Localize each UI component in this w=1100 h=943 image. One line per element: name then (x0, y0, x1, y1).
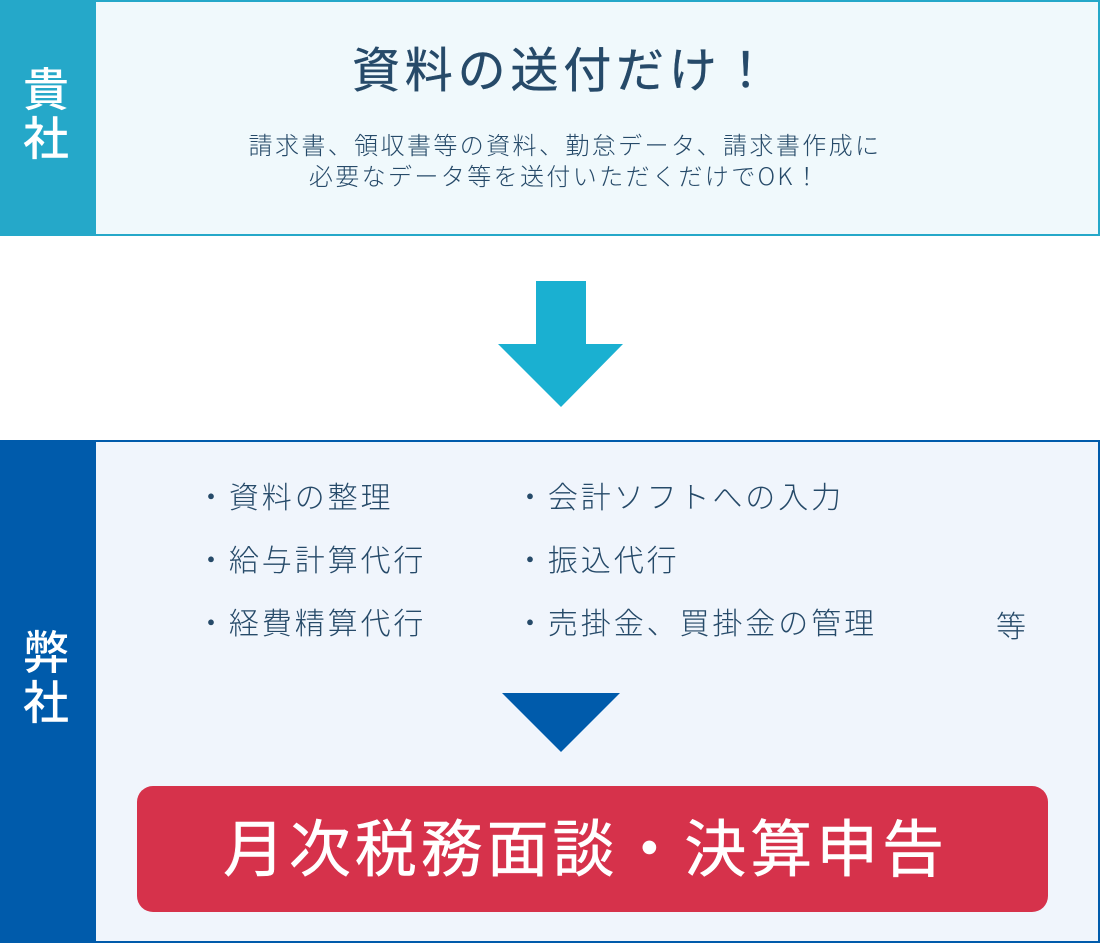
task list left: ・資料の整理 (196, 482, 393, 515)
arrow: down (498, 281, 623, 407)
result banner: 月次税務面談・決算申告 (223, 816, 948, 885)
heading: 資料の送付だけ！ (352, 45, 774, 98)
task list right: ・会計ソフトへの入力 (515, 482, 844, 515)
task list right (515, 482, 877, 641)
panel: our company (0, 440, 1100, 943)
label: 貴社: 貴 (23, 64, 69, 116)
description: 請求書、領収書等の資料、勤怠データ、請求書作成に (249, 126, 881, 161)
task list right: ・振込代行 (515, 545, 680, 578)
panel: your company (0, 0, 1100, 236)
result banner (137, 786, 1048, 912)
label: 貴社: 社 (23, 113, 69, 165)
task list left: ・給与計算代行 (196, 545, 426, 578)
label: 弊社: 社 (23, 677, 69, 729)
arrow: triangle (502, 693, 620, 752)
description: 必要なデータ等を送付いただくだけでOK！ (309, 157, 821, 192)
text: etc: 等 (996, 611, 1026, 644)
task list right: ・売掛金、買掛金の管理 (515, 608, 877, 641)
task list left (196, 482, 426, 641)
label: 弊社: 弊 (23, 627, 69, 679)
label: 貴社 (23, 64, 69, 165)
description (249, 126, 881, 192)
label: 弊社 (23, 627, 69, 729)
task list left: ・経費精算代行 (196, 608, 426, 641)
sidebar: your company background (0, 0, 96, 236)
sidebar: our company background (0, 440, 96, 943)
